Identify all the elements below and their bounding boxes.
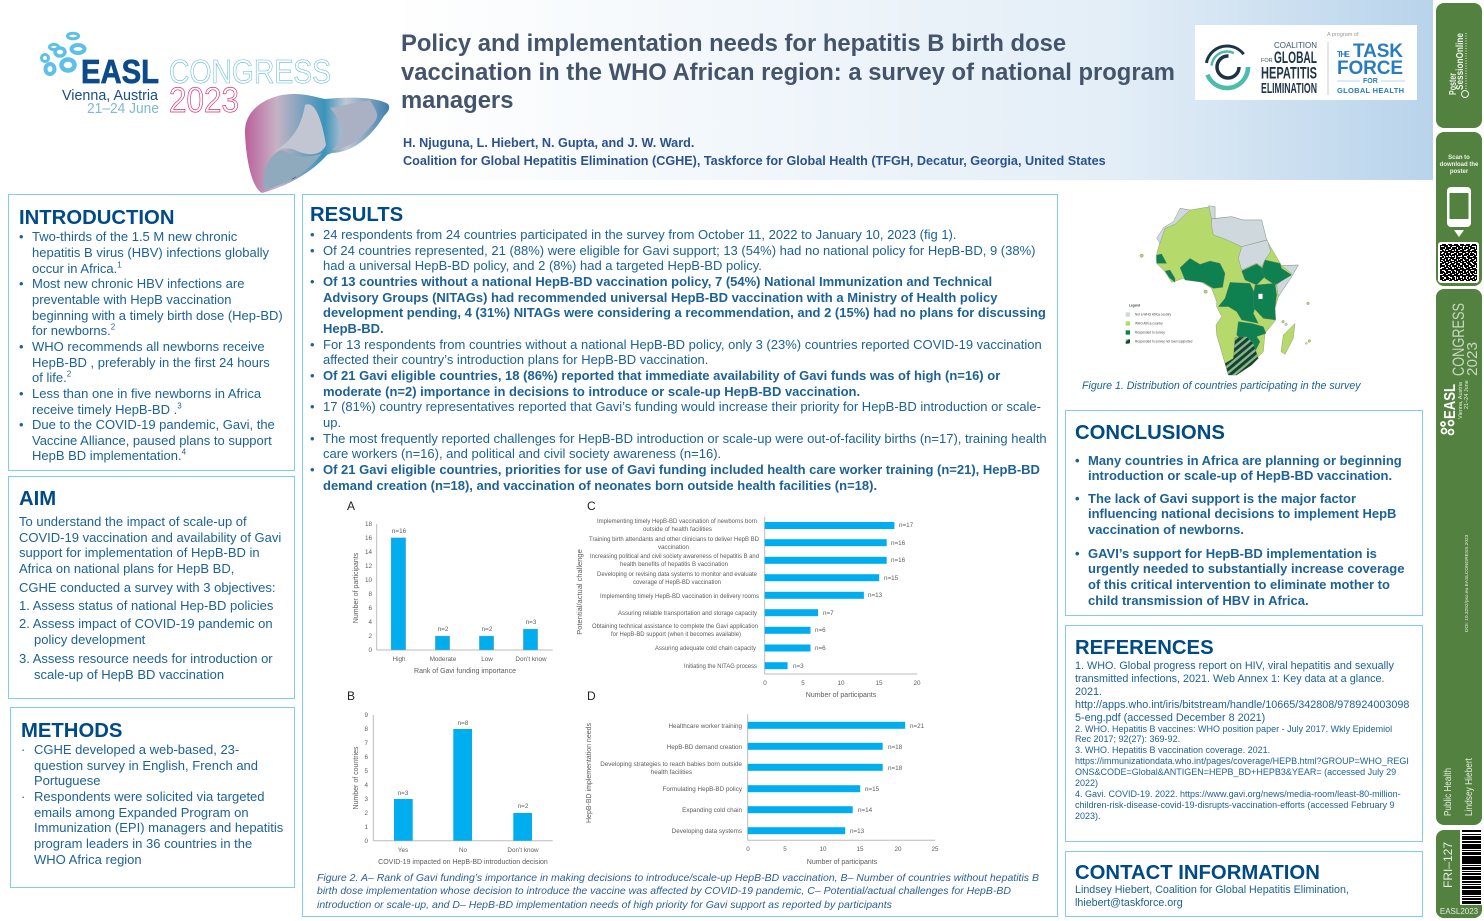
text: reference list: http://apps.who.int/iris/bitstream/handle/10665/342808/978924003098 bbox=[1075, 698, 1409, 710]
bullet list: results: • bbox=[310, 462, 315, 477]
chart D: 20 bbox=[894, 846, 902, 853]
panel: Poster Session Online bbox=[1436, 3, 1482, 128]
panel: EASL Congress poster details bbox=[1436, 289, 1482, 825]
chart C: health benefits of hepatitis B vaccination bbox=[620, 561, 728, 568]
bullet list: introduction: • bbox=[19, 229, 24, 244]
label: DOI: DOI: 10.3252/pso.eu.EASLCONGRESS.2023 bbox=[1464, 534, 1470, 632]
chart D: Developing strategies to reach babies born outside bbox=[600, 761, 742, 768]
header band bbox=[0, 0, 1433, 180]
bullet list: conclusions: • bbox=[1075, 452, 1080, 468]
text: moderate (n=2) importance in decisions to introduce or scale-up HepB-BD vaccination. bbox=[323, 384, 860, 399]
panel: methods: emails among Expanded Program on bbox=[34, 805, 249, 820]
figure 2 caption: Figure 2. A– Rank of Gavi funding’s importance in making decisions to introduce/scale-up HepB-BD vaccination, B– Number of countries without hepatitis B bbox=[317, 872, 1039, 884]
panel: introduction: WHO recommends all newborns receive bbox=[32, 339, 265, 354]
chart C: coverage of HepB-BD vaccination bbox=[633, 579, 721, 586]
chart A bbox=[347, 499, 553, 675]
chart A: 0 bbox=[368, 647, 372, 654]
chart C: Potential/actual challenge bbox=[575, 549, 584, 635]
chart B: B bbox=[347, 689, 355, 703]
chart A: n=3 bbox=[526, 619, 537, 626]
panel: methods: Respondents were solicited via targeted bbox=[34, 789, 265, 804]
chart B: Don’t know bbox=[507, 847, 539, 854]
text: Of 24 countries represented, 21 (88%) were eligible for Gavi support; 13 (54%) had no national policy for HepB-BD, 9 (38%) bbox=[323, 243, 1035, 258]
chart C: 15 bbox=[875, 680, 883, 687]
heading: introduction: INTRODUCTION bbox=[19, 207, 174, 229]
illustration: liver bbox=[244, 94, 390, 193]
chart C: n=17 bbox=[899, 522, 914, 529]
figure 2 caption bbox=[317, 872, 1039, 911]
panel: introduction: occur in Africa.1 bbox=[32, 260, 122, 276]
authors and affiliation: H. Njuguna, L. Hiebert, N. Gupta, and J. W. Ward. bbox=[403, 136, 694, 150]
chart C: Implementing timely HepB-BD vaccination in delivery rooms bbox=[600, 593, 759, 600]
logo: EASL Congress 2023: 2023 bbox=[169, 81, 239, 120]
map legend: Legend bbox=[1129, 304, 1140, 308]
chart D: Number of participants bbox=[807, 859, 878, 866]
panel: Poster Session Online: Poster bbox=[1448, 73, 1459, 95]
bullet list: results: • bbox=[310, 431, 315, 446]
label: session: Public Health bbox=[1442, 768, 1454, 816]
label: CONGRESS 2023 bbox=[1449, 303, 1481, 376]
bullet list: results: • bbox=[310, 274, 315, 289]
bullet list: results: • bbox=[310, 227, 315, 242]
label: poster number: FRI–127 bbox=[1441, 842, 1455, 888]
panel: aim: scale-up of HepB BD vaccination bbox=[34, 667, 224, 682]
bullet list: conclusions: • bbox=[1075, 491, 1080, 506]
heading: references: REFERENCES bbox=[1075, 637, 1214, 659]
panel: conclusions: urgently needed to substantially increase coverage bbox=[1088, 561, 1404, 576]
panel: conclusions: • bbox=[1075, 546, 1080, 561]
text: reference list: 2022) bbox=[1075, 778, 1098, 788]
chart A: 14 bbox=[365, 549, 372, 556]
text: care workers (n=16), and political and civil society awareness (n=16). bbox=[323, 446, 721, 461]
panel: conclusions: GAVI’s support for HepB-BD implementation is bbox=[1088, 546, 1377, 561]
chart C bbox=[575, 499, 921, 699]
map legend: Responded to survey bbox=[1135, 331, 1165, 335]
chart D: 25 bbox=[931, 846, 939, 853]
title: vaccination in the WHO African region: a survey of national program bbox=[401, 59, 1175, 86]
logo: EASL Congress 2023: 21–24 June bbox=[87, 101, 159, 117]
chart D bbox=[586, 689, 939, 866]
chart D: Developing data systems bbox=[672, 828, 742, 835]
chart D: health facilities bbox=[651, 769, 692, 776]
chart C: Assuring adequate cold chain capacity bbox=[655, 645, 757, 652]
chart C: 0 bbox=[763, 680, 767, 687]
text: The most frequently reported challenges for HepB-BD introduction or scale-up were out-of-facility births (n=17), training health bbox=[323, 431, 1047, 446]
icon: phone and QR code bbox=[1438, 187, 1479, 283]
logos: CGHE and Task Force: FOR bbox=[1261, 58, 1273, 64]
panel: introduction: Less than one in five newborns in Africa bbox=[32, 386, 261, 401]
chart D: n=15 bbox=[865, 786, 880, 793]
text: reference list: 5-eng.pdf (accessed December 8 2021) bbox=[1075, 712, 1265, 724]
chart B: n=2 bbox=[518, 803, 529, 810]
chart C: for HepB-BD support (when it becomes available) bbox=[611, 631, 741, 638]
panel: contact information bbox=[1065, 851, 1423, 917]
map legend bbox=[1126, 304, 1193, 344]
chart A: 2 bbox=[368, 633, 372, 640]
label: presenter: Lindsey Hiebert bbox=[1463, 758, 1475, 816]
bullet list: methods: · bbox=[21, 789, 25, 804]
text: aim and objectives: Africa on national plans for HepB BD, bbox=[19, 561, 234, 576]
bullet list: introduction: • bbox=[19, 339, 24, 354]
heading: contact information: CONTACT INFORMATION bbox=[1075, 862, 1320, 884]
chart A: 18 bbox=[365, 521, 372, 528]
panel: scan to download bbox=[1436, 132, 1482, 286]
chart B: n=8 bbox=[458, 720, 469, 727]
panel: Poster Session Online: SessionOnline bbox=[1455, 33, 1466, 90]
logo: EASL Congress 2023: Vienna, Austria bbox=[62, 87, 159, 104]
logo: EASL Congress 2023: CONGRESS bbox=[169, 53, 331, 90]
bullet list: introduction: • bbox=[19, 417, 24, 432]
chart A: 8 bbox=[368, 591, 372, 598]
label: scan to download: Scan to download the poster bbox=[1440, 154, 1478, 174]
bullet list: conclusions bbox=[1075, 452, 1404, 608]
chart D: 15 bbox=[856, 846, 864, 853]
heading: methods: METHODS bbox=[21, 720, 122, 742]
logo: EASL Congress 2023 bbox=[40, 32, 331, 120]
bullet list: introduction bbox=[19, 229, 283, 463]
bullet list: results: • bbox=[310, 399, 315, 414]
panel: methods: program leaders in 36 countries in the bbox=[34, 836, 252, 851]
logos: CGHE and Task Force: COALITION bbox=[1274, 41, 1317, 50]
logos: CGHE and Task Force: A program of bbox=[1327, 32, 1359, 38]
chart D: HepB-BD implementation needs bbox=[586, 723, 593, 823]
panel: references bbox=[1065, 625, 1423, 842]
chart C: n=13 bbox=[868, 592, 883, 599]
panel: introduction: HepB BD implementation.4 bbox=[32, 448, 186, 463]
chart B: 6 bbox=[364, 754, 368, 761]
title: Policy and implementation needs for hepatitis B birth dose bbox=[401, 30, 1066, 57]
panel: introduction: HepB-BD , preferably in the first 24 hours bbox=[32, 355, 270, 370]
panel: methods: Immunization (EPI) managers and hepatitis bbox=[34, 820, 283, 835]
chart D: D bbox=[587, 689, 596, 703]
chart D: n=18 bbox=[888, 765, 903, 772]
text: reference list: transmitted infections, 2021. Web Annex 1: Key data at a glance. bbox=[1075, 672, 1385, 684]
text: reference list: Rec 2017; 92(27): 369-92. bbox=[1075, 734, 1180, 744]
panel: introduction bbox=[8, 194, 295, 471]
heading: conclusions: CONCLUSIONS bbox=[1075, 422, 1225, 444]
chart D: 5 bbox=[783, 846, 787, 853]
panel: conclusions: vaccination of newborns. bbox=[1088, 522, 1244, 537]
figure 1 caption: Figure 1. Distribution of countries participating in the survey bbox=[1082, 380, 1361, 392]
chart C: 10 bbox=[837, 680, 845, 687]
bullet list: introduction: • bbox=[19, 276, 24, 291]
bullet list: methods bbox=[21, 742, 283, 867]
chart A: Rank of Gavi funding importance bbox=[414, 668, 516, 675]
chart A: n=16 bbox=[392, 528, 407, 535]
chart B: 9 bbox=[364, 712, 368, 719]
chart B: 2 bbox=[364, 810, 368, 817]
text: reference list: ONS&CODE=Global&ANTIGEN=HEPB_BD+HEPB3&YEAR= (accessed July 29 bbox=[1075, 767, 1396, 777]
text: Of 21 Gavi eligible countries, 18 (86%) reported that immediate availability of Gavi funds was of high (n=16) or bbox=[323, 368, 1000, 383]
text: aim and objectives: 1. Assess status of national Hep-BD policies bbox=[19, 598, 273, 613]
label: EASL2023: EASL2023 bbox=[1440, 907, 1478, 916]
label: EASL: Vienna, Austria bbox=[1458, 381, 1464, 419]
map legend: WHO Africa country bbox=[1135, 322, 1163, 326]
chart B: n=3 bbox=[398, 790, 409, 797]
text: contact details bbox=[1075, 884, 1349, 909]
logos: CGHE and Task Force: FORCE bbox=[1337, 58, 1403, 79]
text: reference list: 3. WHO. Hepatitis B vaccination coverage. 2021. bbox=[1075, 745, 1270, 755]
chart A: 10 bbox=[365, 577, 372, 584]
chart A: n=2 bbox=[438, 626, 449, 633]
chart B: No bbox=[459, 847, 468, 854]
icon: EASL hexagons bbox=[1441, 420, 1454, 434]
text: reference list: 1. WHO. Global progress report on HIV, viral hepatitis and sexually bbox=[1075, 660, 1394, 672]
panel: methods: WHO Africa region bbox=[34, 852, 142, 867]
chart C: C bbox=[587, 499, 596, 513]
chart B bbox=[347, 689, 553, 866]
text: reference list: 4. Gavi. COVID-19. 2022. https://www.gavi.org/news/media-room/least-80-million- bbox=[1075, 789, 1401, 799]
chart A: Low bbox=[481, 656, 493, 663]
logos: CGHE and Task Force: THE bbox=[1337, 50, 1351, 59]
title bbox=[401, 30, 1175, 114]
text: reference list: https://immunizationdata.who.int/pages/coverage/HEPB.html?GROUP=WHO_REGI bbox=[1075, 756, 1409, 766]
bullet list: results: • bbox=[310, 337, 315, 352]
text: aim and objectives: CGHE conducted a survey with 3 objectives: bbox=[19, 580, 276, 595]
text: Of 21 Gavi eligible countries, priorities for use of Gavi funding included health care worker training (n=21), HepB-BD bbox=[323, 462, 1040, 477]
text: reference list: 2021. bbox=[1075, 686, 1102, 698]
panel: methods bbox=[10, 707, 295, 888]
chart D: Formulating HepB-BD policy bbox=[663, 786, 743, 793]
text: aim and objectives: 3. Assess resource needs for introduction or bbox=[19, 651, 273, 666]
panel: introduction: for newborns.2 bbox=[32, 323, 115, 338]
figure 2 caption: introduction or scale-up, and D– HepB-BD implementation needs of high priority for Gavi support as reported by participants bbox=[317, 899, 892, 911]
chart A: 4 bbox=[368, 619, 372, 626]
text: reference list: 2023). bbox=[1075, 811, 1101, 821]
logos: CGHE and Task Force: GLOBAL bbox=[1274, 48, 1317, 67]
chart C: n=3 bbox=[793, 663, 804, 670]
chart D: Healthcare worker training bbox=[668, 723, 742, 730]
barcode bbox=[1462, 830, 1481, 904]
chart C: n=16 bbox=[891, 557, 906, 564]
chart B: 8 bbox=[364, 726, 368, 733]
chart A: Moderate bbox=[430, 656, 457, 663]
chart D: 0 bbox=[746, 846, 750, 853]
figure 2 caption: birth dose implementation whose decision to introduce the vaccine was affected by COVID-19 pandemic, C– Potential/actual challenges for HepB-BD bbox=[317, 885, 1011, 897]
text: aim and objectives: policy development bbox=[34, 632, 145, 647]
text: Of 13 countries without a national HepB-BD vaccination policy, 7 (54%) National Immunization and Technical bbox=[323, 274, 992, 289]
chart C: Training birth attendants and other clinicians to deliver HepB BD bbox=[589, 536, 760, 543]
panel: conclusions: of this critical intervention to eliminate mother to bbox=[1088, 577, 1390, 592]
map legend: Responded to survey not Gavi supported bbox=[1135, 340, 1193, 344]
logos: CGHE and Task Force: HEPATITIS bbox=[1261, 64, 1317, 82]
chart D: HepB-BD demand creation bbox=[667, 744, 742, 751]
text: Advisory Groups (NITAGs) had recommended universal HepB-BD vaccination with a Ministry of Health policy bbox=[323, 290, 997, 305]
panel: methods: CGHE developed a web-based, 23- bbox=[34, 742, 239, 757]
chart D: Expanding cold chain bbox=[682, 807, 742, 814]
panel: results bbox=[302, 194, 1058, 917]
chart C: vaccination bbox=[658, 544, 689, 551]
chart A: Number of participants bbox=[353, 552, 360, 623]
title: managers bbox=[401, 87, 513, 114]
chart B: Number of countries bbox=[353, 746, 360, 810]
bullet list: results: • bbox=[310, 368, 315, 383]
panel: conclusions: child transmission of HBV in Africa. bbox=[1088, 593, 1309, 608]
chart A: n=2 bbox=[482, 626, 493, 633]
bullet list: results bbox=[310, 227, 1047, 492]
chart D: n=14 bbox=[858, 807, 873, 814]
bullet list: results: • bbox=[310, 243, 315, 258]
chart C: Implementing timely HepB-BD vaccination of newborns born bbox=[597, 518, 757, 525]
text: contact details: Lindsey Hiebert, Coalition for Global Hepatitis Elimination, bbox=[1075, 884, 1349, 896]
panel: introduction: Vaccine Alliance, paused plans to support bbox=[32, 433, 272, 448]
logo: EASL Congress 2023: EASL bbox=[81, 53, 159, 90]
map legend: Not a WHO Africa country bbox=[1135, 313, 1172, 317]
chart C: Increasing political and civil society awareness of hepatitis B and bbox=[590, 553, 759, 560]
sidebar: ePoster panels bbox=[1436, 3, 1482, 918]
text: demand creation (n=18), and vaccination of neonates born outside health facilities (n=18). bbox=[323, 478, 877, 492]
panel: methods: question survey in English, French and bbox=[34, 758, 258, 773]
logos: CGHE and Task Force: ELIMINATION bbox=[1261, 80, 1317, 97]
chart C: n=15 bbox=[884, 575, 899, 582]
label: CONGRESS 2023: 2023 bbox=[1464, 342, 1481, 376]
text: affected their country’s introduction plans for HepB-BD vaccination. bbox=[323, 352, 708, 367]
chart C: Developing or revising data systems to monitor and evaluate bbox=[597, 571, 758, 578]
text: aim and objectives: support for implementation of HepB-BD in bbox=[19, 545, 260, 560]
chart B: COVID-19 impacted on HepB-BD introduction decision bbox=[378, 859, 548, 866]
text: development pending, 4 (31%) NITAGs were considering a recommendation, and 2 (15%) had no plans for discussing bbox=[323, 305, 1046, 320]
authors and affiliation: Coalition for Global Hepatitis Elimination (CGHE), Taskforce for Global Health (TFGH, Decatur, Georgia, United States bbox=[403, 154, 1106, 168]
panel: introduction: preventable with HepB vaccination bbox=[32, 292, 231, 307]
panel: conclusions bbox=[1065, 410, 1423, 616]
chart C: n=7 bbox=[823, 610, 834, 617]
bullet list: methods: · bbox=[21, 742, 25, 757]
text: had a universal HepB-BD policy, and 2 (8%) had a targeted HepB-BD policy. bbox=[323, 258, 762, 273]
panel: poster number and barcode bbox=[1436, 830, 1484, 918]
logos: CGHE and Task Force: GLOBAL HEALTH bbox=[1337, 86, 1404, 95]
chart A: 12 bbox=[365, 563, 372, 570]
text: reference list: children-risk-disease-covid-19-disrupts-vaccination-efforts (accessed February 9 bbox=[1075, 800, 1394, 810]
chart B: 3 bbox=[364, 796, 368, 803]
text: For 13 respondents from countries without a national HepB-BD policy, only 3 (23%) countries reported COVID-19 vaccination bbox=[323, 337, 1042, 352]
text: 17 (81%) country representatives reported that Gavi’s funding would increase their priority for HepB-BD introduction or scale- bbox=[323, 399, 1041, 414]
text: contact details: lhiebert@taskforce.org bbox=[1075, 897, 1183, 909]
chart B: 5 bbox=[364, 768, 368, 775]
text: aim and objectives: To understand the impact of scale-up of bbox=[19, 514, 247, 529]
text: aim and objectives: COVID-19 vaccination and availability of Gavi bbox=[19, 530, 281, 545]
chart C: 20 bbox=[913, 680, 921, 687]
panel: conclusions: Many countries in Africa are planning or beginning bbox=[1088, 452, 1402, 468]
bullet list: introduction: • bbox=[19, 386, 24, 401]
text: aim and objectives bbox=[19, 514, 281, 682]
authors and affiliation bbox=[403, 136, 1106, 168]
chart C: n=16 bbox=[891, 540, 906, 547]
chart B: 7 bbox=[364, 740, 368, 747]
logos: CGHE and Task Force bbox=[1195, 25, 1417, 100]
chart A: High bbox=[393, 656, 406, 663]
text: reference list: 2. WHO. Hepatitis B vaccines: WHO position paper - July 2017. Wkly Epidemiol bbox=[1075, 724, 1392, 734]
chart C: Assuring reliable transportation and storage capacity bbox=[618, 610, 758, 617]
label: EASL bbox=[1442, 380, 1470, 419]
chart B: 1 bbox=[364, 824, 368, 831]
chart B: 4 bbox=[364, 782, 368, 789]
panel: conclusions: influencing national decisions to implement HepB bbox=[1088, 506, 1396, 521]
panel: introduction: Most new chronic HBV infections are bbox=[32, 276, 244, 291]
panel: introduction: hepatitis B virus (HBV) infections globally bbox=[32, 245, 269, 260]
chart C: Initiating the NITAG process bbox=[684, 663, 757, 670]
text: up. bbox=[323, 415, 341, 430]
panel: methods: Portuguese bbox=[34, 773, 100, 788]
text: HepB-BD. bbox=[323, 321, 384, 336]
chart C: n=6 bbox=[815, 627, 826, 634]
label: EASL: EASL bbox=[1442, 384, 1459, 419]
panel: introduction: beginning with a timely birth dose (Hep-BD) bbox=[32, 308, 283, 323]
chart D: n=21 bbox=[910, 723, 925, 730]
panel: introduction: receive timely HepB-BD .3 bbox=[32, 401, 182, 417]
panel: conclusions: The lack of Gavi support is the major factor bbox=[1088, 491, 1356, 506]
text: 24 respondents from 24 countries participated in the survey from October 11, 2022 to January 10, 2023 (fig 1). bbox=[323, 227, 957, 242]
chart A: 6 bbox=[368, 605, 372, 612]
chart A: A bbox=[347, 499, 355, 513]
logos: CGHE and Task Force: TASK bbox=[1353, 41, 1403, 62]
text: reference list bbox=[1075, 660, 1409, 821]
panel: introduction: Two-thirds of the 1.5 M new chronic bbox=[32, 229, 237, 244]
panel: introduction: Due to the COVID-19 pandemic, Gavi, the bbox=[32, 417, 275, 432]
label: EASL: 21–24 June bbox=[1464, 380, 1470, 409]
panel: aim bbox=[8, 476, 295, 699]
chart B: 0 bbox=[364, 838, 368, 845]
chart C: Obtaining technical assistance to complete the Gavi application bbox=[592, 623, 758, 630]
logos: CGHE and Task Force: FOR bbox=[1363, 78, 1378, 85]
chart B: Yes bbox=[398, 847, 408, 854]
chart A: Don’t know bbox=[515, 656, 547, 663]
panel: introduction: of life.2 bbox=[32, 370, 71, 385]
chart A: 16 bbox=[365, 535, 372, 542]
chart D: n=18 bbox=[888, 744, 903, 751]
chart D: 10 bbox=[819, 846, 827, 853]
heading: aim: AIM bbox=[19, 488, 56, 510]
heading: results: RESULTS bbox=[310, 204, 403, 226]
chart C: outside of health facilities bbox=[643, 526, 712, 533]
panel: conclusions: introduction or scale-up of HepB-BD vaccination. bbox=[1088, 468, 1392, 483]
chart C: n=6 bbox=[815, 645, 826, 652]
chart C: 5 bbox=[801, 680, 805, 687]
figure 1: map of Africa bbox=[1126, 205, 1311, 376]
chart D: n=13 bbox=[850, 828, 865, 835]
text: aim and objectives: 2. Assess impact of COVID-19 pandemic on bbox=[19, 616, 273, 631]
chart C: Number of participants bbox=[806, 692, 877, 699]
